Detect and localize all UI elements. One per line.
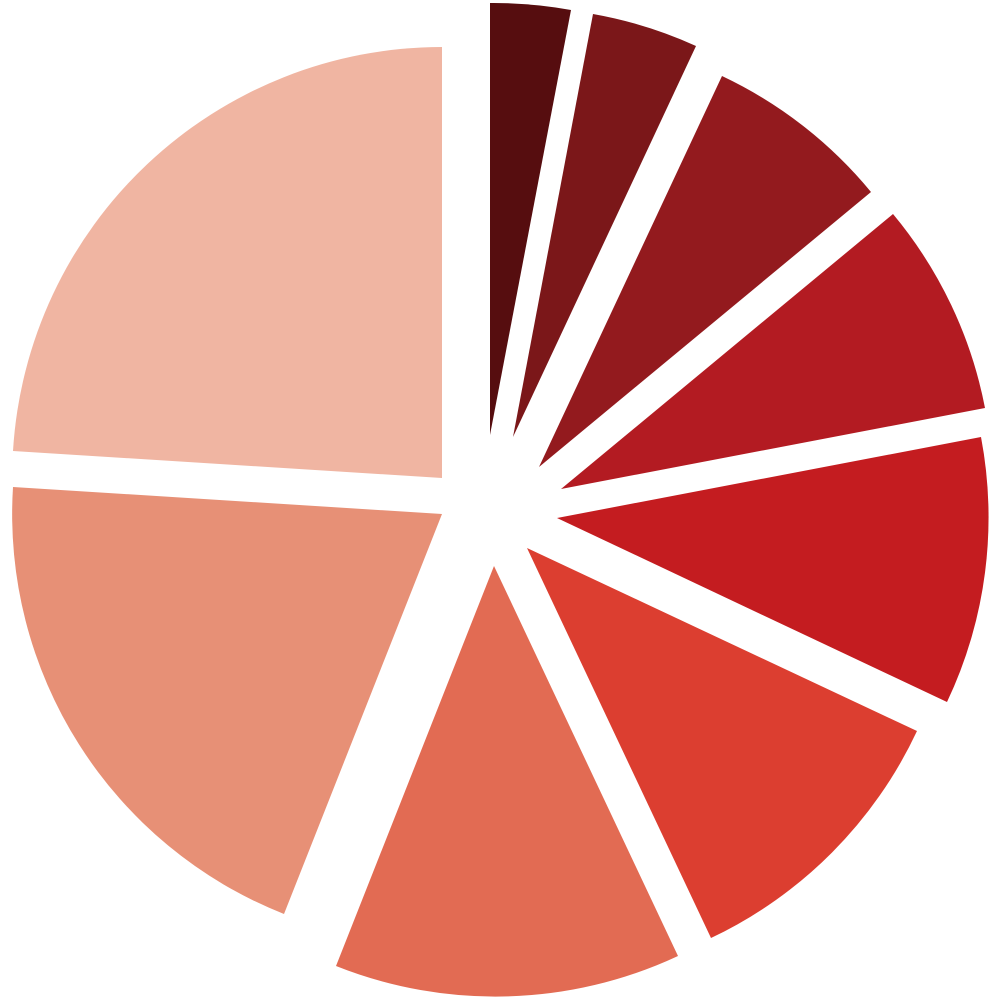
slice 7: coral bbox=[336, 566, 678, 997]
slice 3: deep red bbox=[539, 76, 871, 467]
slice 8: salmon bbox=[12, 487, 442, 914]
slice 6: bright red-orange bbox=[527, 548, 917, 938]
slice 2: dark maroon bbox=[513, 14, 696, 437]
slice 4: crimson bbox=[561, 214, 985, 489]
slice 1: darkest maroon bbox=[490, 3, 571, 435]
slice 9: light peach bbox=[13, 47, 442, 478]
slice 5: red bbox=[557, 437, 989, 702]
